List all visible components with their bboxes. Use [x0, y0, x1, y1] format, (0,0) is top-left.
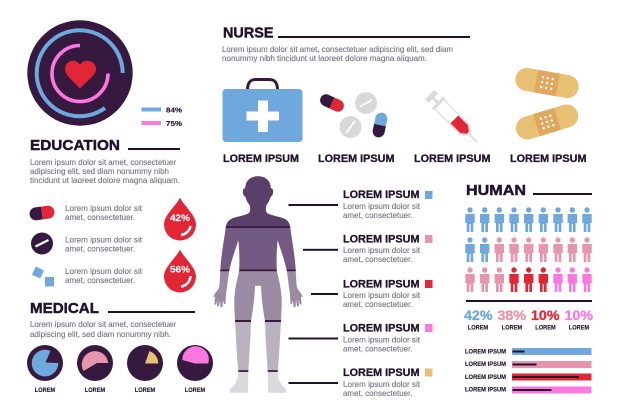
stat: 42%: LOREM — [468, 326, 488, 332]
bar: blue — [465, 348, 592, 356]
list item: pink: LOREM IPSUM — [343, 234, 420, 246]
bar: red: LOREM IPSUM — [465, 375, 506, 381]
stat: 10% magenta: 10% — [564, 307, 594, 323]
text: tablet note — [65, 236, 143, 254]
bar: magenta: LOREM IPSUM — [465, 388, 506, 394]
list item: red: Lorem ipsum dolor sit — [343, 291, 421, 300]
text: tablet note: Lorem ipsum dolor sit — [65, 236, 143, 244]
text: capsule note: amet, consectetuer. — [65, 213, 135, 222]
stat: 10% red: 10% — [531, 307, 560, 323]
list item: gold: amet, consectetuer. — [343, 389, 412, 398]
label: pills: LOREM IPSUM — [318, 153, 394, 165]
legend: ring chart — [142, 108, 183, 128]
heading: human — [466, 182, 592, 199]
icon: syringe — [424, 89, 483, 148]
stat: 42%: 42% — [464, 307, 493, 323]
icon: tablet — [31, 232, 53, 254]
text: education body: tincidunt ut laoreet dolore magna aliquam. — [30, 176, 180, 185]
list item: magenta: amet, consectetuer. — [343, 344, 412, 354]
heading: human: HUMAN — [466, 182, 526, 199]
heading: medical: MEDICAL — [30, 300, 99, 317]
text: cubes note: Lorem ipsum dolor sit — [65, 267, 143, 276]
icon: blood drop 56%: 56% — [170, 264, 190, 274]
label: bandages: LOREM IPSUM — [510, 153, 586, 165]
stat: 38% — [498, 307, 527, 332]
list item: gold: LOREM IPSUM — [343, 367, 420, 379]
icon: education ring chart with heart — [27, 20, 133, 126]
pie chart: pink: LOREM — [85, 388, 105, 394]
icon: bandages — [513, 66, 581, 142]
list item: pink: Lorem ipsum dolor sit — [343, 246, 421, 255]
pie chart: gold — [127, 345, 163, 394]
connector lines — [288, 204, 338, 384]
stat: 10% red: LOREM — [535, 326, 556, 332]
icon: blood drop 42% — [164, 198, 196, 240]
stat: 42% — [464, 307, 493, 332]
text: education body — [30, 158, 180, 185]
list item: magenta: LOREM IPSUM — [343, 322, 420, 334]
text: education body: Lorem ipsum dolor sit amet, consectetuer — [30, 158, 176, 167]
icon: blood drop 42%: 42% — [170, 213, 190, 223]
figure: human body — [213, 176, 303, 393]
stat: 10% magenta: LOREM — [569, 326, 589, 332]
list item: gold: Lorem ipsum dolor sit — [343, 380, 421, 389]
text: nurse body: Lorem ipsum dolor sit amet, consectetuer adipiscing elit, sed diam — [222, 45, 453, 54]
stat: 10% magenta — [564, 307, 594, 332]
bar: pink — [465, 361, 592, 368]
text: medical body — [30, 320, 176, 339]
text: capsule note — [65, 204, 143, 222]
icon: first aid kit — [222, 80, 302, 142]
list item: blue: Lorem ipsum dolor sit — [343, 202, 421, 211]
stat: 38%: 38% — [498, 307, 527, 323]
list item: red — [343, 278, 432, 309]
bar: magenta — [465, 386, 592, 394]
pie chart: gold: LOREM — [135, 388, 155, 394]
bar: pink: LOREM IPSUM — [465, 362, 506, 368]
text: nurse body: nonummy nibh tincidunt ut laoreet dolore magna aliquam. — [222, 54, 427, 63]
text: cubes note: amet, consectetuer. — [65, 276, 135, 285]
pie chart: magenta — [177, 345, 213, 394]
list item: red: amet, consectetuer. — [343, 300, 412, 309]
icon: pills — [318, 92, 388, 138]
pie chart: blue: LOREM — [35, 388, 55, 394]
list item: pink: amet, consectetuer. — [343, 255, 412, 264]
pictogram: people grid — [465, 207, 592, 292]
legend: ring chart: 84% — [166, 108, 183, 114]
text: capsule note: Lorem ipsum dolor sit — [65, 204, 143, 213]
list item: blue: LOREM IPSUM — [343, 189, 420, 201]
icon: blue cubes — [32, 267, 54, 286]
text: education body: adipiscing elit, sed diam nonummy nibh — [30, 167, 169, 176]
icon: blood drop 56% — [164, 250, 196, 292]
label: kit: LOREM IPSUM — [223, 153, 299, 165]
icon: capsule — [29, 205, 55, 221]
heading: nurse: NURSE — [223, 24, 274, 42]
pie chart: pink — [77, 345, 113, 394]
stat: 38%: LOREM — [502, 326, 522, 332]
heading: education: EDUCATION — [30, 137, 120, 154]
text: medical body: adipiscing elit, sed diam nonummy nibh. — [30, 330, 171, 339]
label: syringe: LOREM IPSUM — [414, 153, 490, 165]
text: cubes note — [65, 267, 143, 285]
bar: red — [465, 374, 592, 381]
stat: 10% red — [531, 307, 560, 332]
list item: blue — [343, 189, 432, 220]
list item: red: LOREM IPSUM — [343, 278, 420, 290]
text: nurse body — [222, 45, 453, 63]
list item: magenta — [343, 322, 432, 354]
list item: pink — [343, 234, 432, 264]
legend: ring chart: 75% — [166, 121, 183, 128]
bar: blue: LOREM IPSUM — [465, 350, 506, 356]
pie chart: blue — [27, 345, 63, 394]
list item: gold — [343, 367, 432, 398]
text: tablet note: amet, consectetuer. — [65, 244, 135, 254]
text: medical body: Lorem ipsum dolor sit amet, consectetuer — [30, 320, 176, 329]
list item: blue: amet, consectetuer. — [343, 211, 412, 220]
pie chart: magenta: LOREM — [185, 388, 205, 394]
list item: magenta: Lorem ipsum dolor sit — [343, 336, 421, 344]
